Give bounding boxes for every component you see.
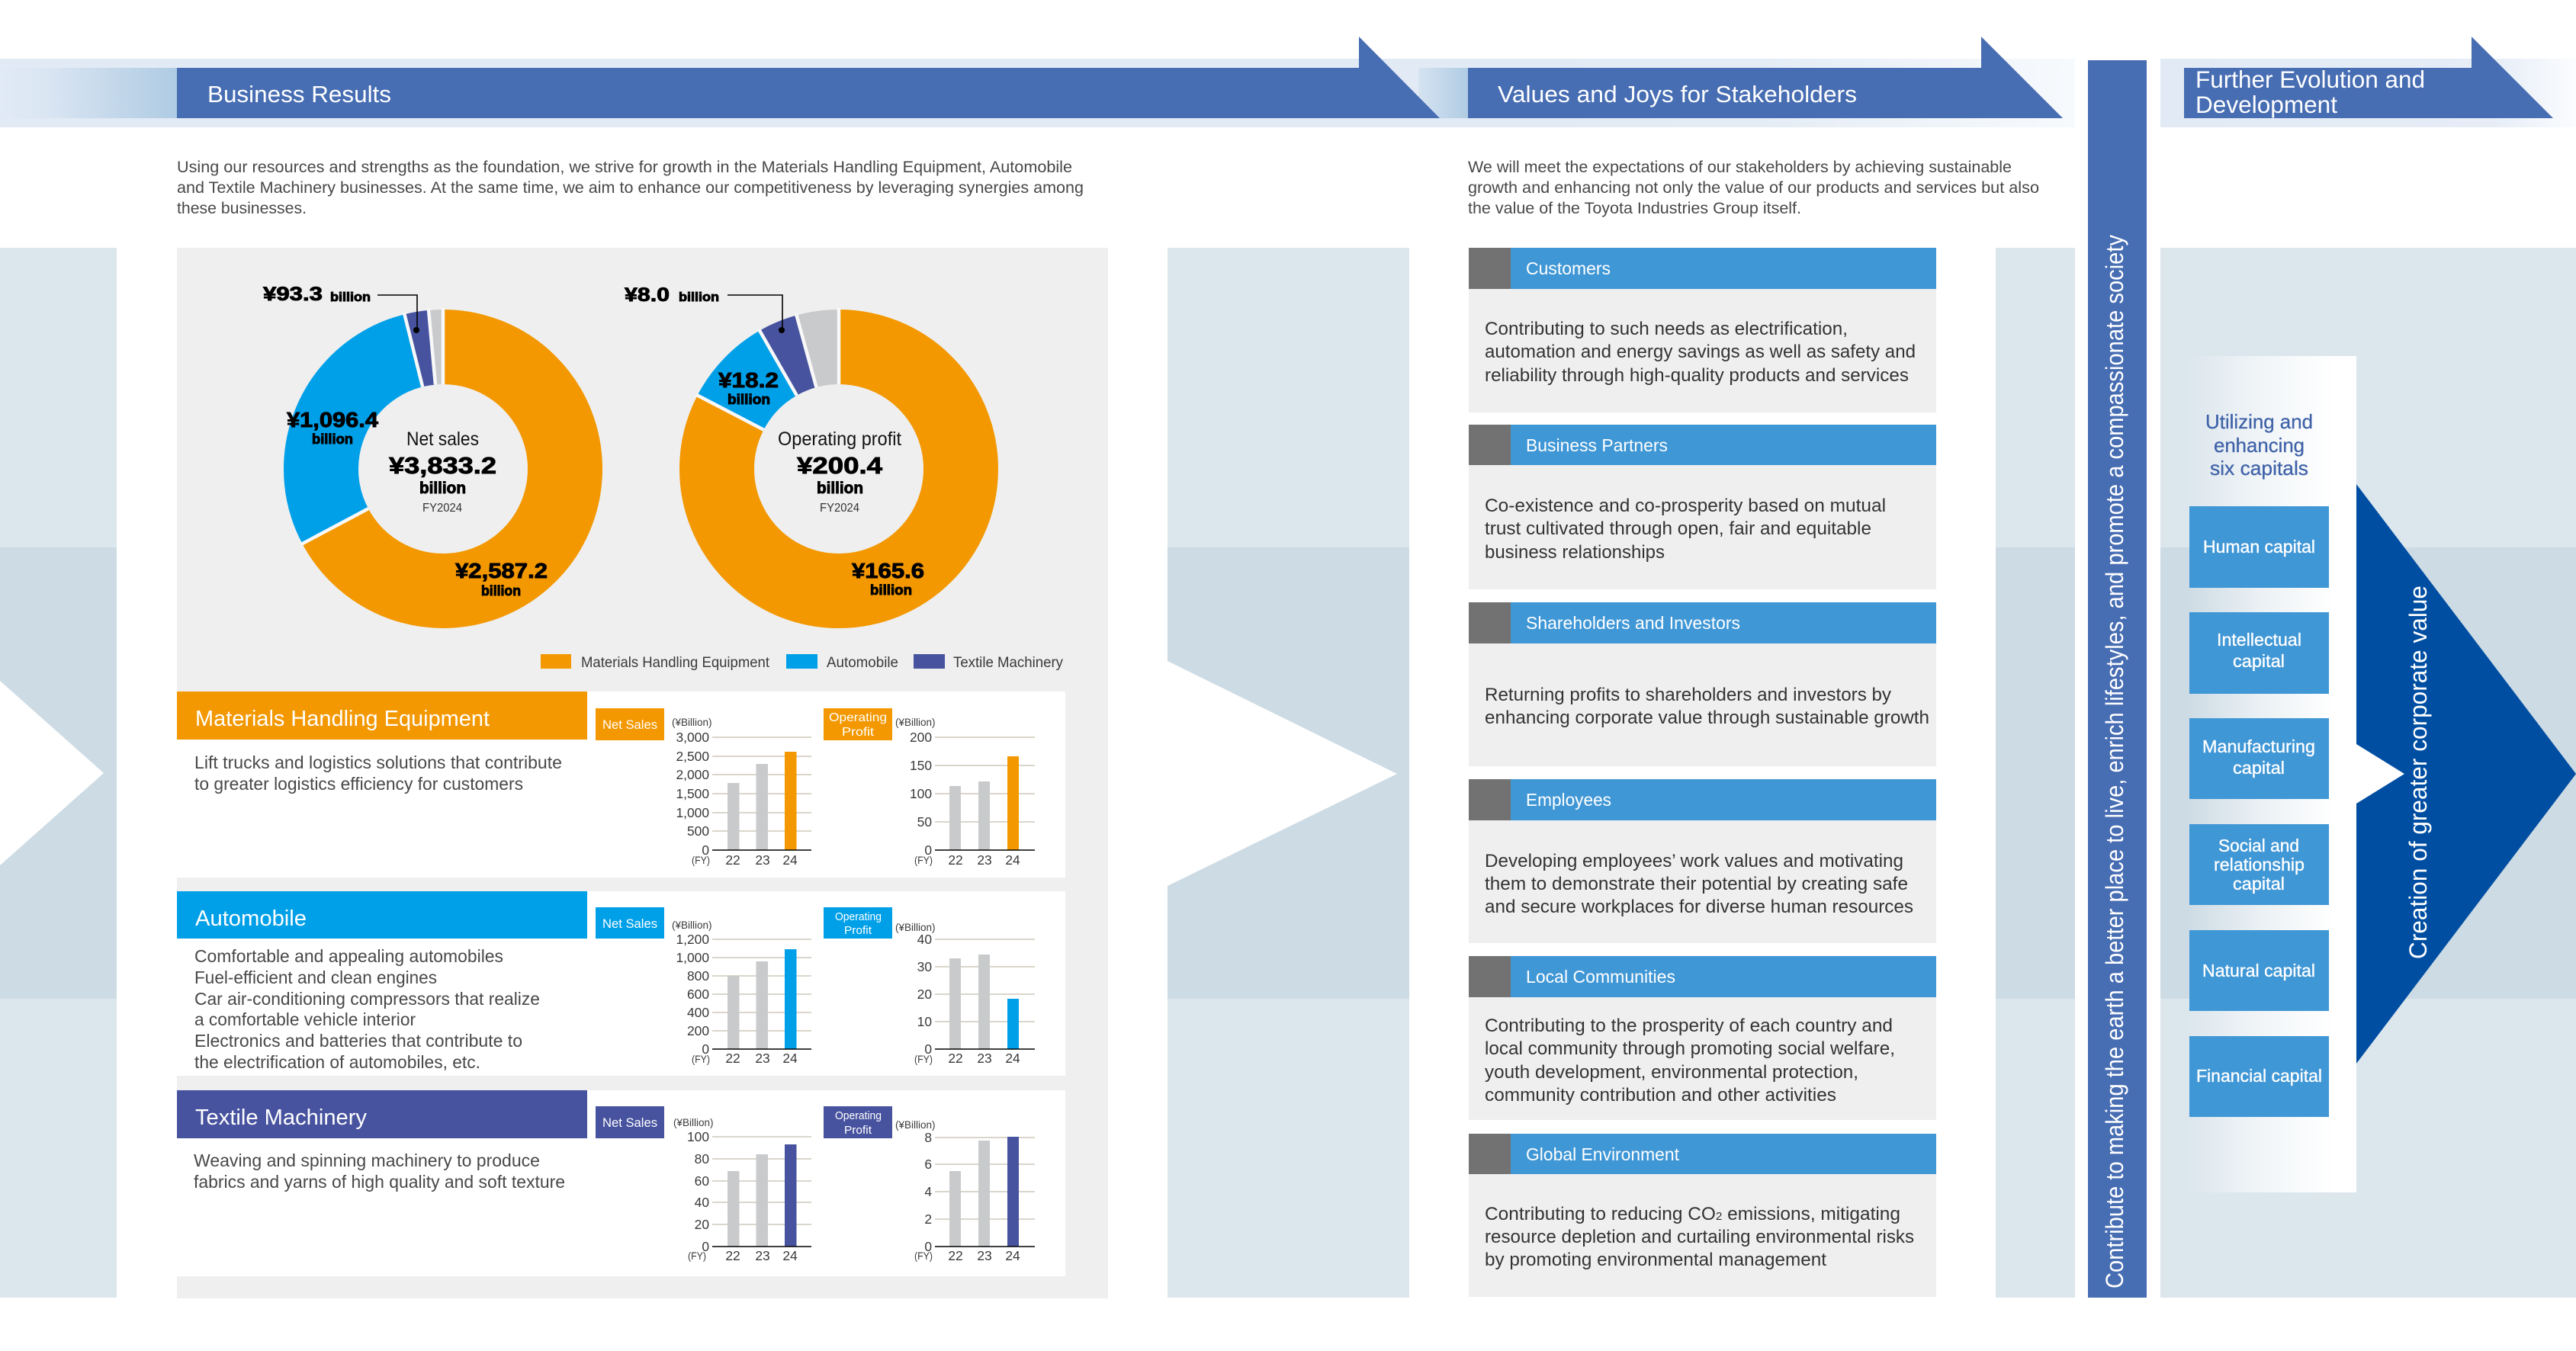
- vertical banner: contribution statement: Contribute to making the earth a better place to live, enrich lifestyles, and promote a compassionate society: [2101, 235, 2128, 1288]
- card: employees: and secure workplaces for diverse human resources: [1485, 897, 1913, 917]
- box: natural capital: Natural capital: [2202, 961, 2315, 980]
- box: social and relationship capital: Social and: [2218, 836, 2299, 855]
- bar chart: net sales: 400: [687, 1005, 709, 1020]
- intro text: stakeholders: [1468, 158, 2039, 217]
- bar chart: operating profit: 23: [977, 852, 992, 868]
- description: automobile: [194, 946, 540, 1072]
- vertical banner: contribution statement: [2088, 60, 2147, 1298]
- bar chart: operating profit: 23: [977, 1051, 992, 1066]
- label: automobile operating profit: billion: [728, 392, 770, 407]
- card: employees: Developing employees’ work values and motivating: [1485, 851, 1903, 871]
- tag: operating profit: Profit: [844, 1124, 872, 1137]
- heading: materials handling equipment: [177, 692, 587, 740]
- card: shareholders and investors: [1469, 602, 1936, 766]
- bar chart: operating profit: [895, 1119, 1035, 1263]
- card: employees: [1469, 779, 1936, 943]
- center label: net sales total: billion: [419, 480, 466, 497]
- card: business partners: Business Partners: [1526, 435, 1668, 455]
- bar chart: net sales: 0: [702, 1041, 709, 1057]
- box: manufacturing capital: [2189, 718, 2329, 799]
- tag: net sales: Net Sales: [602, 717, 657, 732]
- bar chart: operating profit: 200: [910, 730, 932, 745]
- card: global environment: Global Environment: [1526, 1144, 1680, 1164]
- bar chart: net sales: 1,000: [676, 950, 709, 965]
- bar chart: net sales: 60: [695, 1173, 709, 1189]
- description: automobile: Fuel-efficient and clean engines: [194, 968, 437, 987]
- card: customers: Contributing to such needs as electrification,: [1485, 319, 1848, 339]
- panel: automobile: [177, 891, 1065, 1076]
- intro text: business results: Using our resources and strengths as the foundation, we strive for growth in the Materials Handling Equipment, Automobile: [177, 158, 1072, 176]
- bar chart: operating profit: 30: [917, 959, 932, 974]
- card: business partners: Co-existence and co-prosperity based on mutual: [1485, 496, 1886, 516]
- box: human capital: Human capital: [2203, 537, 2315, 557]
- panel: six capitals: [2187, 356, 2356, 1192]
- card: local communities: local community through promoting social welfare,: [1485, 1038, 1895, 1059]
- bar chart: operating profit: 0: [924, 1239, 932, 1254]
- description: textile machinery: fabrics and yarns of high quality and soft texture: [194, 1172, 565, 1192]
- bar chart: operating profit: 24: [1005, 852, 1020, 868]
- panel: materials handling equipment: [177, 692, 1065, 878]
- bar chart: operating profit: 0: [924, 842, 932, 858]
- bar chart: net sales: 80: [695, 1151, 709, 1166]
- card: global environment: by promoting environmental management: [1485, 1250, 1826, 1270]
- bar chart: net sales: (¥Billion): [672, 919, 712, 931]
- bar chart: operating profit: 10: [917, 1014, 932, 1029]
- bar chart: operating profit: 6: [924, 1157, 932, 1172]
- arrow: creation of greater corporate value: Creation of greater corporate value: [2404, 586, 2432, 959]
- description: automobile: Car air-conditioning compressors that realize: [194, 989, 540, 1009]
- label: automobile operating profit: [718, 368, 779, 407]
- card: shareholders and investors: Shareholders and Investors: [1526, 613, 1740, 633]
- bar chart: net sales: 24: [782, 1051, 798, 1066]
- label: textile machinery net sales: ¥93.3: [263, 284, 323, 305]
- center label: operating profit total: [778, 428, 901, 515]
- label: textile machinery operating profit: ¥8.0: [625, 284, 670, 306]
- center label: net sales total: [389, 428, 496, 515]
- bar chart: net sales: 40: [695, 1195, 709, 1210]
- bar chart: net sales: 23: [755, 1051, 770, 1066]
- bar chart: net sales: (¥Billion): [672, 717, 712, 728]
- center label: operating profit total: Operating profit: [778, 428, 901, 450]
- legend: [541, 654, 1063, 671]
- box: manufacturing capital: Manufacturing: [2202, 736, 2315, 756]
- card: local communities: [1469, 956, 1936, 1120]
- bar chart: operating profit: (FY): [914, 855, 933, 866]
- donut chart: net sales: [263, 284, 565, 598]
- label: textile machinery operating profit: [625, 284, 719, 306]
- bar chart: net sales: 24: [782, 1248, 798, 1263]
- legend: Textile Machinery: [953, 654, 1063, 671]
- leader line: textile machinery operating profit: [728, 295, 785, 333]
- heading: automobile: Automobile: [195, 907, 307, 931]
- card: shareholders and investors: enhancing corporate value through sustainable growth: [1485, 708, 1929, 728]
- bar chart: net sales: (FY): [688, 1250, 706, 1262]
- bar chart: net sales: (¥Billion): [673, 1117, 714, 1128]
- description: textile machinery: Weaving and spinning machinery to produce: [194, 1150, 540, 1170]
- arrow heading: Further Evolution and Development: Development: [2195, 91, 2337, 118]
- card: global environment: resource depletion and curtailing environmental risks: [1485, 1227, 1914, 1247]
- bar chart: operating profit: 23: [977, 1248, 992, 1263]
- tag: operating profit: Operating: [835, 910, 882, 923]
- center label: operating profit total: ¥200.4: [797, 452, 883, 479]
- description: automobile: Comfortable and appealing automobiles: [194, 946, 503, 966]
- card: business partners: [1469, 425, 1936, 589]
- label: materials handling net sales: ¥2,587.2: [455, 559, 548, 582]
- label: materials handling operating profit: billion: [870, 582, 912, 598]
- box: natural capital: [2189, 930, 2329, 1011]
- arrow heading: Business Results: [177, 37, 1440, 118]
- arrow heading: Values and Joys for Stakeholders: Values and Joys for Stakeholders: [1498, 81, 1857, 108]
- card: local communities: Contributing to the prosperity of each country and: [1485, 1016, 1893, 1036]
- bar chart: operating profit: 2: [924, 1211, 932, 1227]
- panel: textile machinery: [177, 1090, 1065, 1276]
- bar chart: net sales: 500: [687, 823, 709, 839]
- box: social and relationship capital: relationship: [2214, 855, 2305, 874]
- description: materials handling equipment: [194, 753, 562, 794]
- card: global environment: [1469, 1134, 1936, 1297]
- bar chart: net sales: 22: [725, 852, 740, 868]
- label: automobile net sales: ¥1,096.4: [287, 408, 378, 432]
- card: local communities: community contribution and other activities: [1485, 1085, 1836, 1106]
- box: intellectual capital: [2189, 612, 2329, 694]
- bar chart: net sales: 0: [702, 842, 709, 858]
- bar chart: net sales: 200: [687, 1023, 709, 1038]
- box: manufacturing capital: capital: [2233, 758, 2285, 778]
- bar chart: operating profit: 100: [910, 786, 932, 801]
- bar chart: net sales: 1,000: [676, 805, 709, 820]
- intro text: stakeholders: We will meet the expectations of our stakeholders by achieving sustainable: [1468, 158, 2012, 176]
- description: materials handling equipment: to greater logistics efficiency for customers: [194, 774, 523, 794]
- panel: business results: [177, 248, 1108, 1298]
- card: customers: [1469, 248, 1936, 412]
- center label: net sales total: ¥3,833.2: [389, 452, 496, 479]
- description: automobile: Electronics and batteries that contribute to: [194, 1031, 522, 1051]
- center label: net sales total: FY2024: [422, 502, 462, 515]
- heading: textile machinery: [177, 1090, 587, 1138]
- card: customers: Customers: [1526, 258, 1611, 278]
- arrow heading: Further Evolution and Development: Further Evolution and: [2195, 66, 2425, 93]
- tag: net sales: [596, 1106, 664, 1138]
- bar chart: operating profit: 22: [948, 1248, 963, 1263]
- center label: net sales total: Net sales: [406, 428, 479, 450]
- card: customers: reliability through high-quality products and services: [1485, 365, 1909, 386]
- tag: net sales: [596, 907, 664, 939]
- bar chart: net sales: [673, 1117, 811, 1263]
- bar chart: net sales: 20: [695, 1217, 709, 1232]
- intro text: business results: these businesses.: [177, 199, 307, 217]
- bar chart: net sales: 22: [725, 1248, 740, 1263]
- box: financial capital: [2189, 1036, 2329, 1117]
- bar chart: net sales: 2,500: [676, 749, 709, 764]
- tag: operating profit: [824, 907, 892, 939]
- box: intellectual capital: capital: [2233, 651, 2285, 671]
- label: automobile operating profit: ¥18.2: [718, 368, 779, 392]
- card: global environment: Contributing to reducing CO 2 emissions, mitigating: [1485, 1204, 1900, 1224]
- tag: net sales: Net Sales: [602, 1115, 657, 1130]
- bar chart: operating profit: (¥Billion): [895, 922, 936, 933]
- top band: right section: [2160, 59, 2576, 127]
- heading: six capitals: Utilizing and: [2205, 410, 2313, 433]
- center label: operating profit total: FY2024: [820, 502, 859, 515]
- bar chart: net sales: 0: [702, 1239, 709, 1254]
- bar chart: operating profit: 24: [1005, 1248, 1020, 1263]
- label: automobile net sales: billion: [312, 432, 353, 447]
- tag: operating profit: [824, 1106, 892, 1138]
- bar chart: operating profit: 22: [948, 852, 963, 868]
- card: local communities: youth development, environmental protection,: [1485, 1062, 1858, 1083]
- box: intellectual capital: Intellectual: [2217, 630, 2301, 650]
- tag: operating profit: Operating: [835, 1109, 882, 1122]
- arrow heading: Values and Joys for Stakeholders: [1468, 37, 2063, 118]
- box: financial capital: Financial capital: [2196, 1066, 2322, 1086]
- legend: Automobile: [827, 654, 898, 671]
- intro text: stakeholders: growth and enhancing not only the value of our products and services but also: [1468, 178, 2039, 197]
- heading: automobile: [177, 891, 587, 939]
- box: social and relationship capital: [2189, 824, 2329, 905]
- description: automobile: a comfortable vehicle interior: [194, 1009, 416, 1029]
- bar chart: net sales: 22: [725, 1051, 740, 1066]
- bar chart: net sales: 100: [687, 1129, 709, 1144]
- intro text: stakeholders: the value of the Toyota Industries Group itself.: [1468, 199, 1801, 217]
- bar chart: operating profit: (¥Billion): [895, 1119, 936, 1131]
- tag: net sales: [596, 708, 664, 740]
- bar chart: operating profit: 8: [924, 1130, 932, 1145]
- bar chart: net sales: 23: [755, 852, 770, 868]
- bar chart: net sales: 1,200: [676, 932, 709, 947]
- background column: right of stakeholders: [1996, 248, 2075, 1298]
- top band: left section: [0, 59, 2075, 127]
- bar chart: operating profit: 20: [917, 987, 932, 1002]
- heading: six capitals: [2205, 410, 2313, 480]
- heading: textile machinery: Textile Machinery: [195, 1106, 368, 1130]
- bar chart: operating profit: (¥Billion): [895, 717, 936, 728]
- bar chart: net sales: 600: [687, 987, 709, 1002]
- bar chart: net sales: 3,000: [676, 730, 709, 745]
- donut chart: operating profit: [625, 284, 961, 598]
- description: textile machinery: [194, 1150, 565, 1192]
- leader line: textile machinery net sales: [377, 295, 419, 333]
- card: local communities: Local Communities: [1526, 967, 1675, 987]
- card: business partners: business relationships: [1485, 542, 1665, 563]
- heading: six capitals: six capitals: [2210, 457, 2308, 480]
- box: human capital: [2189, 506, 2329, 588]
- label: materials handling net sales: [455, 559, 548, 598]
- bar chart: operating profit: 0: [924, 1041, 932, 1057]
- bar chart: net sales: 23: [755, 1248, 770, 1263]
- bar chart: operating profit: (FY): [914, 1054, 933, 1065]
- arrow: creation of greater corporate value: [2356, 484, 2576, 1064]
- bar chart: net sales: (FY): [692, 1054, 710, 1065]
- legend: Materials Handling Equipment: [581, 654, 770, 671]
- card: employees: them to demonstrate their potential by creating safe: [1485, 874, 1908, 894]
- card: shareholders and investors: Returning profits to shareholders and investors by: [1485, 685, 1891, 705]
- tag: net sales: Net Sales: [602, 916, 657, 931]
- bar chart: operating profit: 4: [924, 1184, 932, 1199]
- box: social and relationship capital: capital: [2233, 874, 2285, 894]
- tag: operating profit: Profit: [844, 924, 872, 937]
- bar chart: operating profit: 24: [1005, 1051, 1020, 1066]
- label: materials handling operating profit: [852, 559, 924, 598]
- bar chart: operating profit: 150: [910, 758, 932, 773]
- tag: operating profit: Operating: [829, 711, 887, 724]
- label: textile machinery net sales: billion: [330, 290, 371, 304]
- bar chart: net sales: 800: [687, 968, 709, 984]
- label: automobile net sales: [287, 408, 378, 447]
- bar chart: net sales: 1,500: [676, 786, 709, 801]
- bar chart: net sales: 24: [782, 852, 798, 868]
- heading: materials handling equipment: Materials Handling Equipment: [195, 707, 490, 731]
- background column: between results and stakeholders: [1168, 248, 1409, 1298]
- bar chart: operating profit: 22: [948, 1051, 963, 1066]
- description: materials handling equipment: Lift trucks and logistics solutions that contribute: [194, 753, 562, 772]
- bar chart: operating profit: (FY): [914, 1250, 933, 1262]
- bar chart: net sales: [672, 919, 811, 1066]
- label: textile machinery net sales: [263, 284, 371, 305]
- arrow heading: Business Results: Business Results: [207, 81, 391, 108]
- card: business partners: trust cultivated through open, fair and equitable: [1485, 518, 1871, 539]
- label: materials handling operating profit: ¥165.6: [852, 559, 924, 582]
- bar chart: operating profit: 40: [917, 932, 932, 947]
- heading: six capitals: enhancing: [2214, 434, 2305, 457]
- center label: operating profit total: billion: [817, 480, 863, 497]
- bar chart: operating profit: [895, 922, 1035, 1066]
- arrow heading: Further Evolution and Development: [2184, 37, 2553, 118]
- bar chart: operating profit: 50: [917, 814, 932, 830]
- card: customers: automation and energy savings as well as safety and: [1485, 342, 1916, 362]
- bar chart: operating profit: [895, 717, 1035, 868]
- intro text: business results: and Textile Machinery businesses. At the same time, we aim to enhance our competitiveness by leveraging synergies among: [177, 178, 1084, 197]
- background column: far right: [2160, 248, 2576, 1298]
- bar chart: net sales: (FY): [692, 855, 710, 866]
- background column: far left: [0, 248, 117, 1298]
- bar chart: net sales: [672, 717, 811, 868]
- description: automobile: the electrification of automobiles, etc.: [194, 1052, 480, 1072]
- label: textile machinery operating profit: billion: [679, 290, 719, 304]
- bar chart: net sales: 2,000: [676, 767, 709, 782]
- tag: operating profit: Profit: [842, 726, 875, 739]
- card: employees: Employees: [1526, 790, 1611, 810]
- label: materials handling net sales: billion: [481, 583, 521, 598]
- intro text: business results: [177, 158, 1084, 217]
- tag: operating profit: [824, 708, 892, 740]
